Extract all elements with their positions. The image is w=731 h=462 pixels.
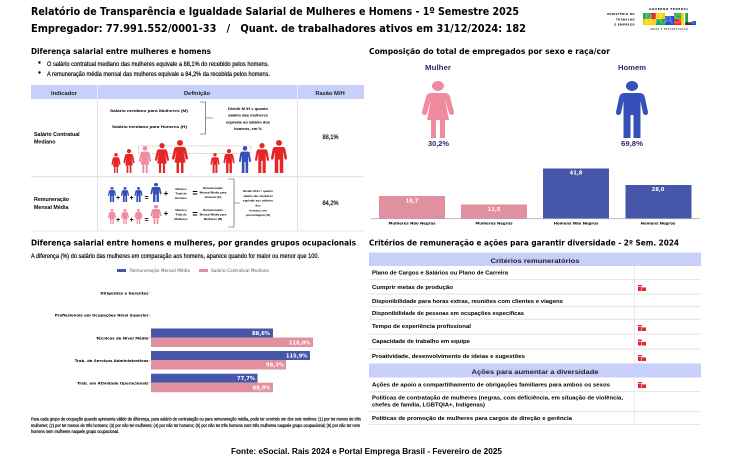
table header: Indicador (51, 91, 78, 97)
row: remuneração mensal média: Remuneração (203, 186, 223, 190)
column chart: raça/cor: 41,8 (570, 170, 583, 176)
criteria rows: Disponibilidade de pessoas em ocupações específicas (372, 311, 524, 317)
row: remuneração mensal média: Total de (175, 212, 187, 216)
subheading: A diferença (%) do salário das mulheres em comparação aos homens, aparece quando for maior ou menor que 100. (31, 254, 319, 260)
title: Empregador: 77.991.552/0001-33 / Quant. de trabalhadores ativos em 31/12/2024: 182 (31, 22, 526, 35)
bar chart: grupos ocupacionais: 77,7% (237, 376, 256, 382)
icons: soma homens (108, 183, 162, 202)
criteria rows: Políticas de promoção de mulheres para cargos de direção e gerência (372, 416, 573, 422)
footnote: Para cada grupo de ocupação quando apresenta válido de diferença, para salário de contratação ou para remuneração média, pode ter ocorrido um dos seis motivos: (1) por ter menos de três (31, 416, 362, 422)
criteria rows: Capacidade de trabalho em equipe (372, 339, 470, 345)
bar chart: grupos ocupacionais: Técnicos de Nível Médio (96, 336, 149, 340)
row: remuneração mensal média: Mulheres (M) (204, 217, 222, 221)
footnote (31, 416, 362, 434)
bullet list (38, 61, 270, 78)
row: salário contratual mediano (34, 102, 339, 173)
footnote: homens nem mulheres naquele grupo ocupacional. (31, 429, 119, 434)
logo: ministério e governo federal: E EMPREGO (614, 22, 635, 26)
bar chart: grupos ocupacionais: 98,3% (266, 362, 285, 368)
criteria rows: Tempo de experiência profissional (372, 324, 472, 330)
column chart: raça/cor: 28,0 (652, 187, 665, 193)
row: remuneração mensal média: + (129, 195, 134, 202)
column chart: raça/cor: Mulheres Não Negras (388, 220, 436, 226)
column chart: raça/cor: Mulheres Negras (475, 220, 513, 226)
criteria rows: Políticas de contratação de mulheres (negras, com deficiência, em situação de violência, (372, 396, 624, 402)
row: salário contratual mediano: homens, em % (234, 126, 262, 131)
row: remuneração mensal média: Mensal Média para (200, 190, 227, 194)
row: salário contratual mediano: Mediano (34, 140, 56, 146)
criteria rows: Cumprir metas de produção (372, 285, 454, 291)
bullet list: O salário contratual mediano das mulheres equivale a 88,1% do recebido pelos homens. (47, 62, 269, 68)
logo: ministério e governo federal: MINISTÉRIO DO (607, 11, 635, 16)
table header: Definição (184, 91, 211, 97)
pictogram: mulher: 30,2% (428, 141, 450, 148)
column chart: raça/cor: Homens Não Negros (554, 220, 599, 226)
bar chart: grupos ocupacionais: 118,0% (289, 340, 311, 346)
icons: critério presente (638, 285, 646, 388)
bar chart: grupos ocupacionais: Dirigentes e Gerentes (100, 290, 149, 296)
row: remuneração mensal média: Remuneração (34, 197, 70, 203)
icons: soma mulheres (108, 205, 162, 224)
legend: Salário Contratual Mediano (211, 268, 269, 273)
row: remuneração mensal média: = (144, 195, 149, 202)
heading: diferença salarial: Diferença salarial entre mulheres e homens (31, 47, 211, 56)
table header: Razão M/H (315, 91, 345, 97)
heading: critérios: Critérios de remuneração e ações para garantir diversidade - 2º Sem. 2024 (369, 238, 679, 248)
legend (117, 268, 269, 273)
logo: ministério e governo federal: GOVERNO FEDERAL (649, 7, 689, 11)
criteria rows (372, 270, 624, 422)
row: salário contratual mediano: Dividir M /H = quanto (228, 106, 269, 111)
header: critérios remuneratórios (369, 252, 701, 266)
row: remuneração mensal média: Mensal Média para (200, 212, 227, 216)
bar chart: grupos ocupacionais: 115,9% (286, 354, 308, 360)
logo: ministério e governo federal: BRASIL (644, 12, 695, 28)
header: ações: Ações para aumentar a diversidade (472, 369, 599, 376)
row: remuneração mensal média: Total de (175, 192, 187, 196)
bar chart: grupos ocupacionais: Profissionais em Ocupações Nível Superior (55, 312, 149, 318)
row: remuneração mensal média: + (116, 217, 120, 224)
icons: homens (210, 140, 287, 173)
pictogram: homem: Homem (618, 65, 646, 72)
row: remuneração mensal média: + (116, 195, 120, 202)
icons: mulheres (112, 140, 188, 173)
row: remuneração mensal média: + (164, 189, 169, 198)
row: remuneração mensal média: Mulheres (174, 217, 188, 221)
source: Fonte: eSocial. Rais 2024 e Portal Emprega Brasil - Fevereiro de 2025 (231, 447, 503, 456)
bar chart: grupos ocupacionais: 88,9% (252, 386, 271, 392)
row: remuneração mensal média: equivale aos salários (243, 198, 273, 202)
column chart: raça/cor: Homens Negros (641, 220, 676, 226)
row: remuneração mensal média: = (192, 209, 198, 219)
pictogram: homem: 69,8% (621, 141, 644, 148)
heading: composição: Composição do total de empregados por sexo e raça/cor (369, 47, 610, 56)
row: salário contratual mediano: Salário mediano para Mulheres (M) (110, 108, 189, 113)
row: salário contratual mediano: Salário Contratual (34, 132, 80, 138)
row: remuneração mensal média: Dividir M /H = quanto (243, 189, 273, 193)
row: remuneração mensal média: Homens (H) (205, 195, 221, 199)
row: remuneração mensal média: Mensal Média (34, 205, 68, 211)
bar chart: grupos ocupacionais: 88,6% (252, 331, 271, 337)
criteria rows: Plano de Cargos e Salários ou Plano de Carreira (372, 270, 509, 276)
row: salário contratual mediano: salário das mulheres (228, 113, 269, 118)
bar chart: grupos ocupacionais: Trab. de Serviços Administrativos (75, 358, 149, 363)
criteria rows: Ações de apoio a compartilhamento de obrigações familiares para ambos os sexos (372, 382, 610, 388)
row: remuneração mensal média: Homens (175, 196, 187, 200)
logo: ministério e governo federal (607, 7, 696, 31)
footnote: mulheres; (2) por ter menos de três homens; (3) por não ter mulheres; (4) por não ter homens; (5) por não ter três homens nem três mulheres naquele grupo ocupacional; (6) por não ter nem (31, 423, 360, 428)
row: remuneração mensal média: 84,2% (322, 201, 339, 207)
row: remuneração mensal média: salário das mulheres (243, 194, 273, 198)
row: salário contratual mediano: equivale ao salário dos (226, 119, 271, 124)
criteria rows: chefes de família, LGBTQIA+, Indígenas) (372, 402, 485, 408)
row: remuneração mensal média: Remuneração (203, 208, 223, 212)
row: remuneração mensal média: + (129, 217, 134, 224)
row: remuneração mensal média: + (164, 209, 169, 218)
row: remuneração mensal média: Número (175, 187, 187, 191)
pictogram: mulher (422, 65, 454, 148)
row: remuneração mensal média (34, 179, 339, 227)
row: remuneração mensal média: Número (175, 208, 187, 212)
column chart: raça/cor (371, 168, 700, 226)
pictogram: mulher: Mulher (425, 65, 451, 72)
bar chart: grupos ocupacionais: Trab. em Atividade Operacionais (77, 380, 149, 386)
header: critérios remuneratórios: Critérios remuneratórios (490, 258, 580, 265)
row: remuneração mensal média: dos (255, 204, 261, 208)
table header (31, 85, 364, 99)
table: critérios e ações (369, 252, 701, 425)
bullet list: A remuneração média mensal das mulheres equivale a 84,2% da recebida pelos homens. (47, 72, 270, 78)
header: ações (369, 364, 701, 378)
row: remuneração mensal média: = (192, 188, 198, 198)
heading: diferença por grupos ocupacionais: Diferença salarial entre homens e mulheres, por grandes grupos ocupacionais (31, 238, 356, 248)
row: salário contratual mediano: Salário mediano para Homens (H) (112, 124, 188, 129)
title: Relatório de Transparência e Igualdade Salarial de Mulheres e Homens - 1º Semestre 2025 (31, 5, 519, 18)
row: remuneração mensal média: homens, em (249, 208, 267, 212)
title (31, 5, 526, 35)
criteria rows: Proatividade, desenvolvimento de ideias e sugestões (372, 354, 525, 360)
logo: ministério e governo federal: TRABALHO (616, 18, 635, 22)
pictogram: homem (616, 65, 648, 148)
bar chart: grupos ocupacionais (55, 288, 313, 393)
row: remuneração mensal média: porcentagem (%) (246, 213, 270, 217)
row: salário contratual mediano: 88,1% (322, 135, 339, 141)
row: remuneração mensal média: = (144, 217, 149, 224)
table: indicadores (31, 85, 364, 232)
column chart: raça/cor: 11,5 (488, 207, 501, 213)
column chart: raça/cor: 18,7 (406, 198, 419, 204)
criteria rows: Disponibilidade para horas extras, reuniões com clientes e viagens (372, 299, 563, 305)
logo: ministério e governo federal: UNIÃO E RECONSTRUÇÃO (650, 28, 688, 31)
legend: Remuneração Mensal Média (130, 268, 190, 273)
